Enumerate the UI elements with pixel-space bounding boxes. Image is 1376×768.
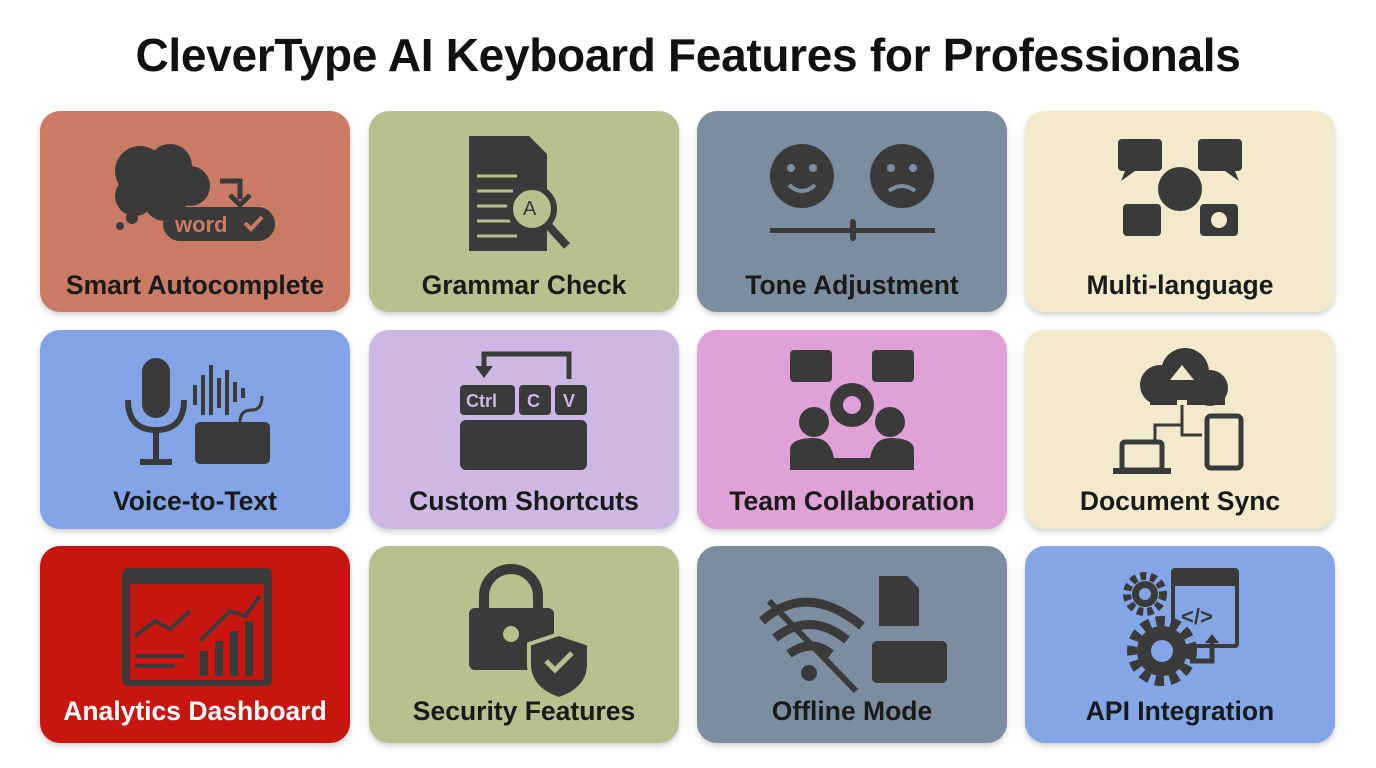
card: Grammar Check: [369, 111, 679, 312]
card: Custom Shortcuts: Ctrl: [466, 391, 497, 411]
card: Document Sync: [1025, 330, 1335, 529]
card: Offline Mode: Offline Mode: [772, 696, 932, 726]
card: API Integration: [1025, 546, 1335, 743]
title: CleverType AI Keyboard Features for Professionals: [135, 29, 1240, 81]
card: Security Features: Security Features: [413, 696, 635, 726]
card: Custom Shortcuts: V: [563, 391, 575, 411]
card: Smart Autocomplete: Smart Autocomplete: [66, 270, 324, 300]
card: Grammar Check: Grammar Check: [422, 270, 626, 300]
card: Custom Shortcuts: [369, 330, 679, 529]
card: Tone Adjustment: [697, 111, 1007, 312]
card: Grammar Check: A: [523, 198, 537, 220]
card: Document Sync: Document Sync: [1080, 486, 1280, 516]
card: Analytics Dashboard: Analytics Dashboard: [63, 696, 327, 726]
card: Voice-to-Text: Voice-to-Text: [113, 486, 277, 516]
card: Team Collaboration: [697, 330, 1007, 529]
card: Team Collaboration: Team Collaboration: [729, 486, 975, 516]
card: Security Features: [369, 546, 679, 743]
card: Offline Mode: [697, 546, 1007, 743]
card: Custom Shortcuts: C: [527, 391, 540, 411]
card: API Integration: </>: [1181, 604, 1213, 629]
card: Custom Shortcuts: Custom Shortcuts: [409, 486, 639, 516]
card: Voice-to-Text: [40, 330, 350, 529]
card: Smart Autocomplete: word: [174, 212, 228, 237]
card: API Integration: API Integration: [1086, 696, 1274, 726]
card: Smart Autocomplete: [40, 111, 350, 312]
card: Analytics Dashboard: [40, 546, 350, 743]
card: Multi-language: [1025, 111, 1335, 312]
card: Multi-language: Multi-language: [1087, 270, 1273, 300]
card: Tone Adjustment: Tone Adjustment: [745, 270, 959, 300]
